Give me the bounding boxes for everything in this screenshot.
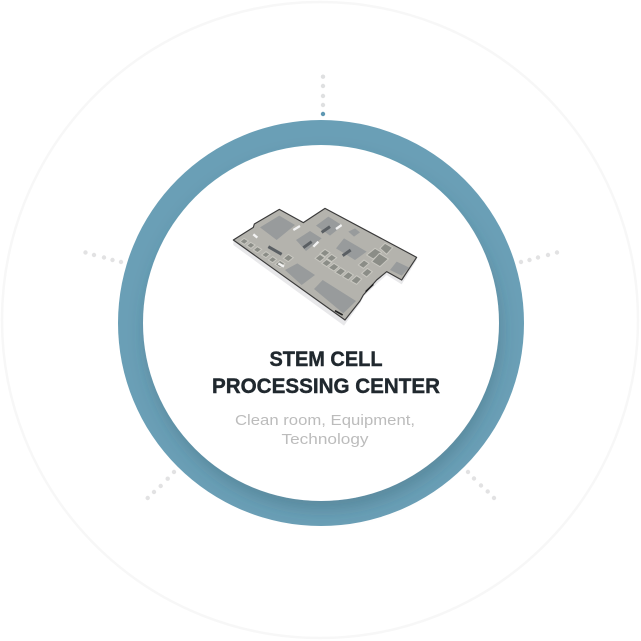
white inner disc	[143, 145, 499, 501]
title: STEM CELL	[270, 348, 383, 371]
dotted spoke: bottom left	[146, 470, 176, 500]
building floor	[233, 208, 417, 320]
dotted spoke: left	[83, 250, 123, 264]
dotted spoke: bottom right	[466, 470, 496, 500]
large rooms	[260, 216, 409, 313]
title	[212, 348, 440, 398]
subtitle: Technology	[282, 431, 369, 448]
dotted spoke: right	[519, 250, 559, 264]
equipment	[268, 227, 351, 256]
subtitle: Clean room, Equipment,	[235, 412, 415, 429]
subtitle	[235, 412, 415, 448]
blue ring	[118, 120, 524, 526]
dotted spoke: top	[321, 74, 325, 116]
building base wall	[233, 240, 417, 326]
floor plan illustration	[233, 208, 417, 326]
dark window marks	[335, 284, 373, 315]
title: PROCESSING CENTER	[212, 375, 440, 398]
small rooms	[240, 238, 393, 284]
